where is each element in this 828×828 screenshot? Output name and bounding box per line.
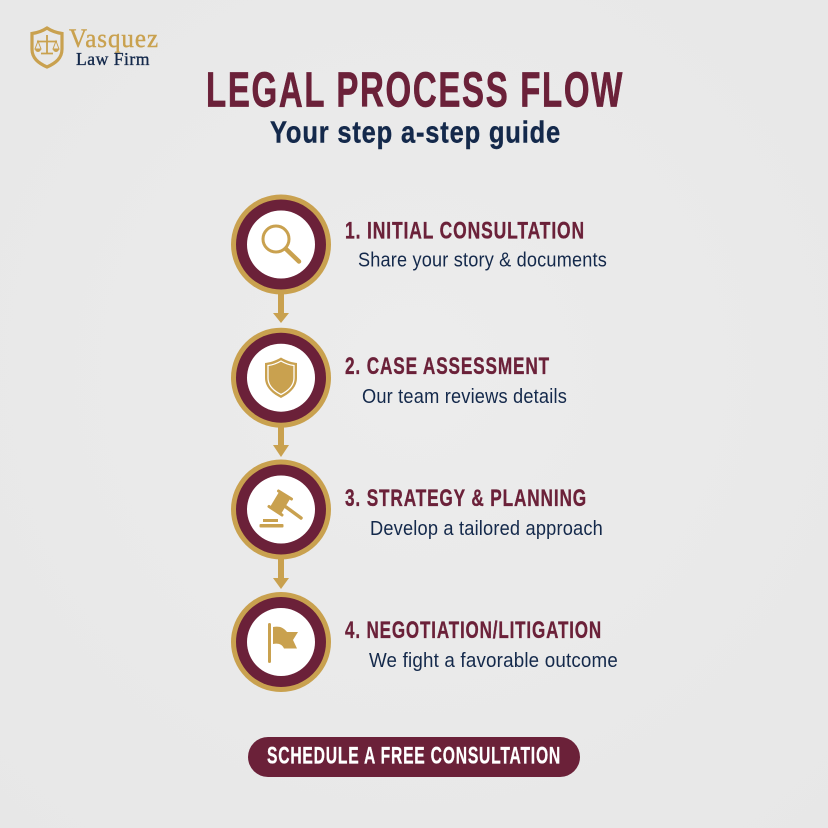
logo: Vasquez Law Firm	[32, 24, 159, 69]
arrow: step 2 to 3	[273, 426, 289, 457]
icon: gavel in ring	[231, 460, 331, 560]
step 4: negotiation or litigation	[231, 592, 618, 692]
title: LEGAL PROCESS FLOW	[206, 64, 624, 118]
step 3: strategy and planning	[231, 460, 603, 560]
call to action button: SCHEDULE A FREE CONSULTATION	[267, 742, 561, 770]
step 1 description: Share your story & documents	[358, 250, 607, 272]
step 3 description: Develop a tailored approach	[370, 518, 603, 540]
step 4 heading: 4. NEGOTIATION/LITIGATION	[345, 617, 602, 644]
step 3 heading: 3. STRATEGY & PLANNING	[345, 485, 587, 512]
step 2 description: Our team reviews details	[362, 386, 567, 408]
logo name: Vasquez	[69, 24, 159, 53]
icon: shield in ring	[231, 328, 331, 428]
logo subtitle: Law Firm	[76, 49, 150, 69]
step 1 heading: 1. INITIAL CONSULTATION	[345, 218, 585, 245]
icon: flag in ring	[231, 592, 331, 692]
step 2 heading: 2. CASE ASSESSMENT	[345, 353, 550, 380]
step 2: case assessment	[231, 328, 567, 428]
step 1: initial consultation	[231, 194, 607, 294]
call to action button	[248, 737, 580, 777]
step 4 description: We fight a favorable outcome	[369, 650, 618, 672]
arrow: step 1 to 2	[273, 293, 289, 323]
arrow: step 3 to 4	[273, 558, 289, 589]
icon: shield with scales	[32, 28, 62, 67]
subtitle: Your step a-step guide	[270, 114, 561, 150]
icon: magnifying glass in ring	[231, 194, 331, 294]
